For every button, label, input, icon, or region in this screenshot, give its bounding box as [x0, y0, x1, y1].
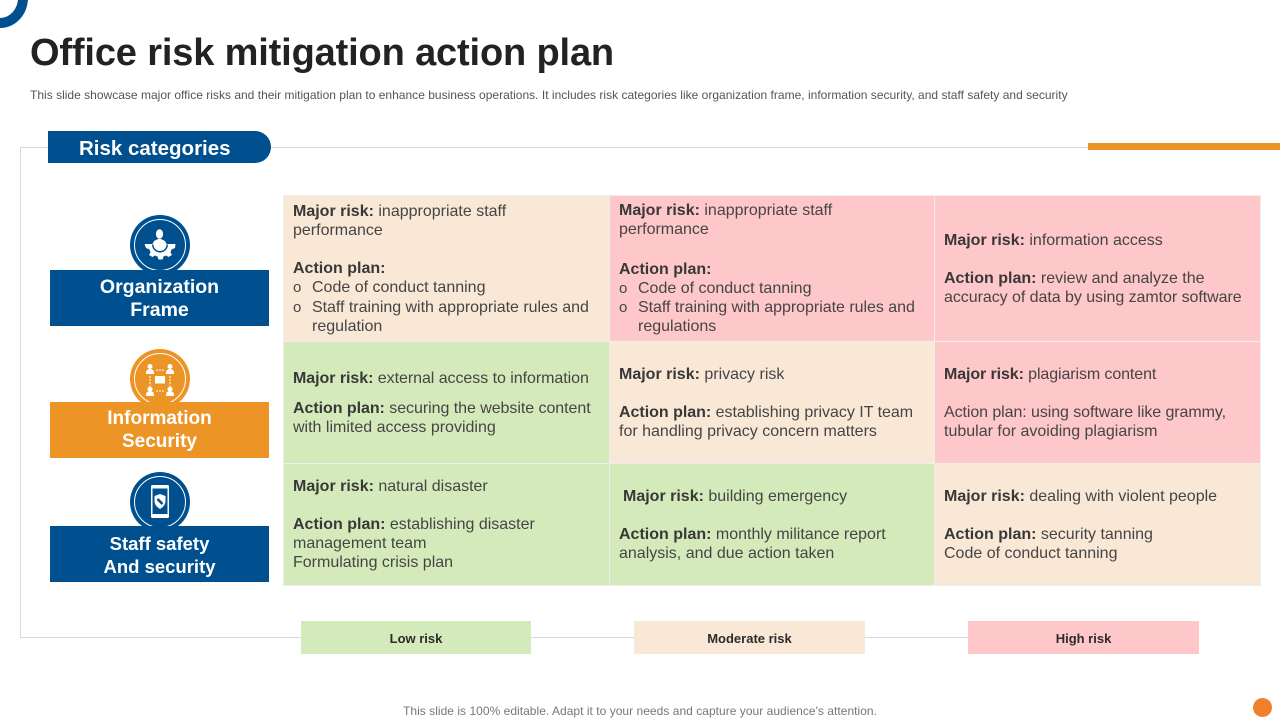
heading: risk categories	[48, 131, 271, 163]
cell: organization, high: regulations	[638, 318, 716, 335]
cell: staff, low	[283, 463, 610, 586]
cell: organization, moderate: Code of conduct tanning	[312, 279, 485, 296]
legend: low risk	[301, 621, 531, 654]
cell: organization, high: o	[619, 299, 627, 316]
cell: organization, high: o	[619, 280, 627, 297]
cell: organization, moderate: o	[293, 299, 301, 316]
cell: organization, moderate: Action plan:	[293, 260, 385, 277]
cell: organization, high: Major risk: inappropriate staff	[619, 202, 832, 219]
cell: staff, moderate: Major risk: dealing with violent people	[944, 488, 1217, 505]
icon: phone with shield	[130, 472, 190, 526]
cell: staff, low 2	[609, 463, 935, 586]
label bar: Frame	[130, 299, 189, 321]
cell: staff, low: Major risk: natural disaster	[293, 478, 488, 495]
orange page dot	[1253, 698, 1272, 717]
title: Office risk mitigation action plan	[30, 32, 614, 74]
cell: organization, high 2	[934, 195, 1261, 342]
cell: information, low	[283, 341, 610, 464]
label bar: Organization	[100, 276, 219, 298]
cell: staff, low 2: Major risk: building emergency	[623, 488, 847, 505]
cell: organization, moderate: performance	[293, 222, 383, 239]
label bar: Security	[122, 431, 197, 452]
cell: information, high: tubular for avoiding plagiarism	[944, 423, 1157, 440]
cell: information, moderate	[609, 341, 935, 464]
legend: high risk: High risk	[1056, 631, 1111, 646]
cell: organization, high 2: Action plan: review and analyze the	[944, 270, 1205, 287]
label bar: Information	[107, 408, 212, 429]
risk matrix table	[283, 195, 1261, 586]
cell: organization, moderate	[283, 195, 610, 342]
icon: person and gear	[130, 215, 190, 270]
cell: organization, high: Staff training with appropriate rules and	[638, 299, 915, 316]
cell: staff, low 2: Action plan: monthly militance report	[619, 526, 886, 543]
label bar	[50, 402, 269, 458]
cell: organization, high 2: Major risk: information access	[944, 232, 1163, 249]
cell: information, moderate: Action plan: establishing privacy IT team	[619, 404, 913, 421]
cell: staff, moderate: Code of conduct tanning	[944, 545, 1117, 562]
corner decoration	[0, 0, 28, 28]
cell: organization, moderate: Major risk: inappropriate staff	[293, 203, 506, 220]
cell: organization, moderate: regulation	[312, 318, 382, 335]
cell: information, low: with limited access providing	[293, 419, 496, 436]
legend: high risk	[968, 621, 1199, 654]
cell: information, high	[934, 341, 1261, 464]
cell: staff, moderate: Action plan: security tanning	[944, 526, 1153, 543]
cell: staff, moderate	[934, 463, 1261, 586]
label bar: And security	[103, 556, 216, 577]
subtitle: This slide showcase major office risks and their mitigation plan to enhance business operations. It includes risk categories like organization frame, information security, and staff safety and security	[30, 88, 1068, 102]
legend: moderate risk: Moderate risk	[707, 631, 792, 646]
category: staff safety and security	[50, 472, 269, 582]
icon: network and briefcase	[130, 349, 190, 402]
label bar: Staff safety	[110, 533, 209, 554]
cell: information, low: Action plan: securing the website content	[293, 400, 591, 417]
cell: information, moderate: Major risk: privacy risk	[619, 366, 784, 383]
cell: organization, high: Action plan:	[619, 261, 711, 278]
cell: staff, low 2: analysis, and due action taken	[619, 545, 834, 562]
cell: information, moderate: for handling privacy concern matters	[619, 423, 877, 440]
cell: staff, low: Action plan: establishing disaster	[293, 516, 535, 533]
legend: low risk: Low risk	[390, 631, 442, 646]
cell: information, high: Major risk: plagiarism content	[944, 366, 1156, 383]
cell: organization, high	[609, 195, 935, 342]
cell: organization, moderate: Staff training with appropriate rules and	[312, 299, 589, 316]
cell: information, low: Major risk: external access to information	[293, 370, 589, 387]
heading: risk categories: Risk categories	[79, 137, 231, 160]
cell: organization, high: Code of conduct tanning	[638, 280, 811, 297]
orange accent bar	[1088, 143, 1280, 150]
category: information security	[50, 349, 269, 458]
cell: organization, high 2: accuracy of data by using zamtor software	[944, 289, 1242, 306]
footer note: This slide is 100% editable. Adapt it to your needs and capture your audience's attention.	[403, 704, 877, 718]
cell: organization, high: performance	[619, 221, 709, 238]
cell: staff, low: Formulating crisis plan	[293, 554, 453, 571]
cell: organization, moderate: o	[293, 279, 301, 296]
label bar	[50, 526, 269, 582]
cell: staff, low: management team	[293, 535, 426, 552]
legend: moderate risk	[634, 621, 865, 654]
category: organization frame	[50, 215, 269, 326]
label bar	[50, 270, 269, 326]
cell: information, high: Action plan: using software like grammy,	[944, 404, 1226, 421]
